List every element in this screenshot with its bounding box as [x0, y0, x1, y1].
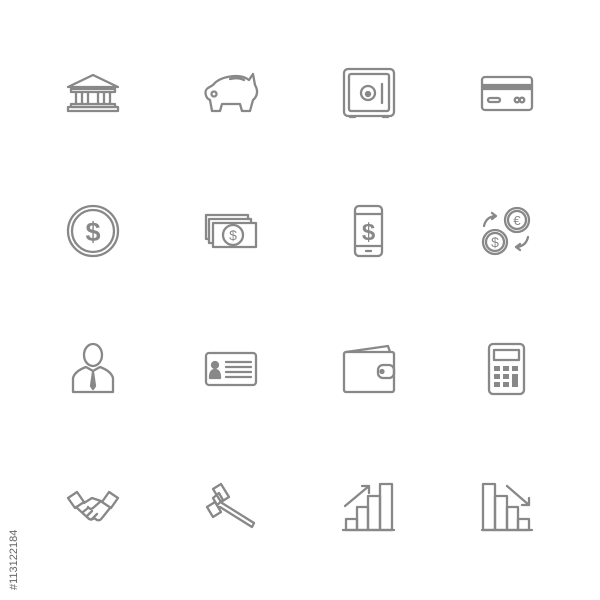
icon: bank: [68, 75, 118, 111]
icon: handshake: [68, 492, 118, 520]
icon: currency exchange: $: [491, 234, 499, 250]
icon: credit card: [482, 77, 532, 110]
icon: calculator: [489, 344, 524, 394]
icon: ID card: [206, 353, 256, 385]
icon: currency exchange: €: [513, 213, 521, 228]
icon: mobile payment: $: [362, 219, 376, 246]
icon: chart decline: [482, 484, 532, 530]
icon: dollar coin: [68, 206, 118, 256]
icon: piggy bank: [206, 74, 257, 111]
icon: cash stack: $: [229, 227, 237, 243]
icon: cash stack: [206, 215, 256, 247]
icon: businessman: [73, 344, 113, 392]
icon: mobile payment: [355, 206, 382, 256]
icon: chart growth: [343, 484, 394, 530]
stock id text: #113122184: [8, 530, 20, 590]
icon: wallet: [344, 346, 394, 392]
icon: currency exchange: [483, 208, 529, 254]
icon: gavel: [207, 484, 254, 527]
icon: safe: [344, 69, 394, 117]
icon: dollar coin: $: [85, 217, 101, 247]
